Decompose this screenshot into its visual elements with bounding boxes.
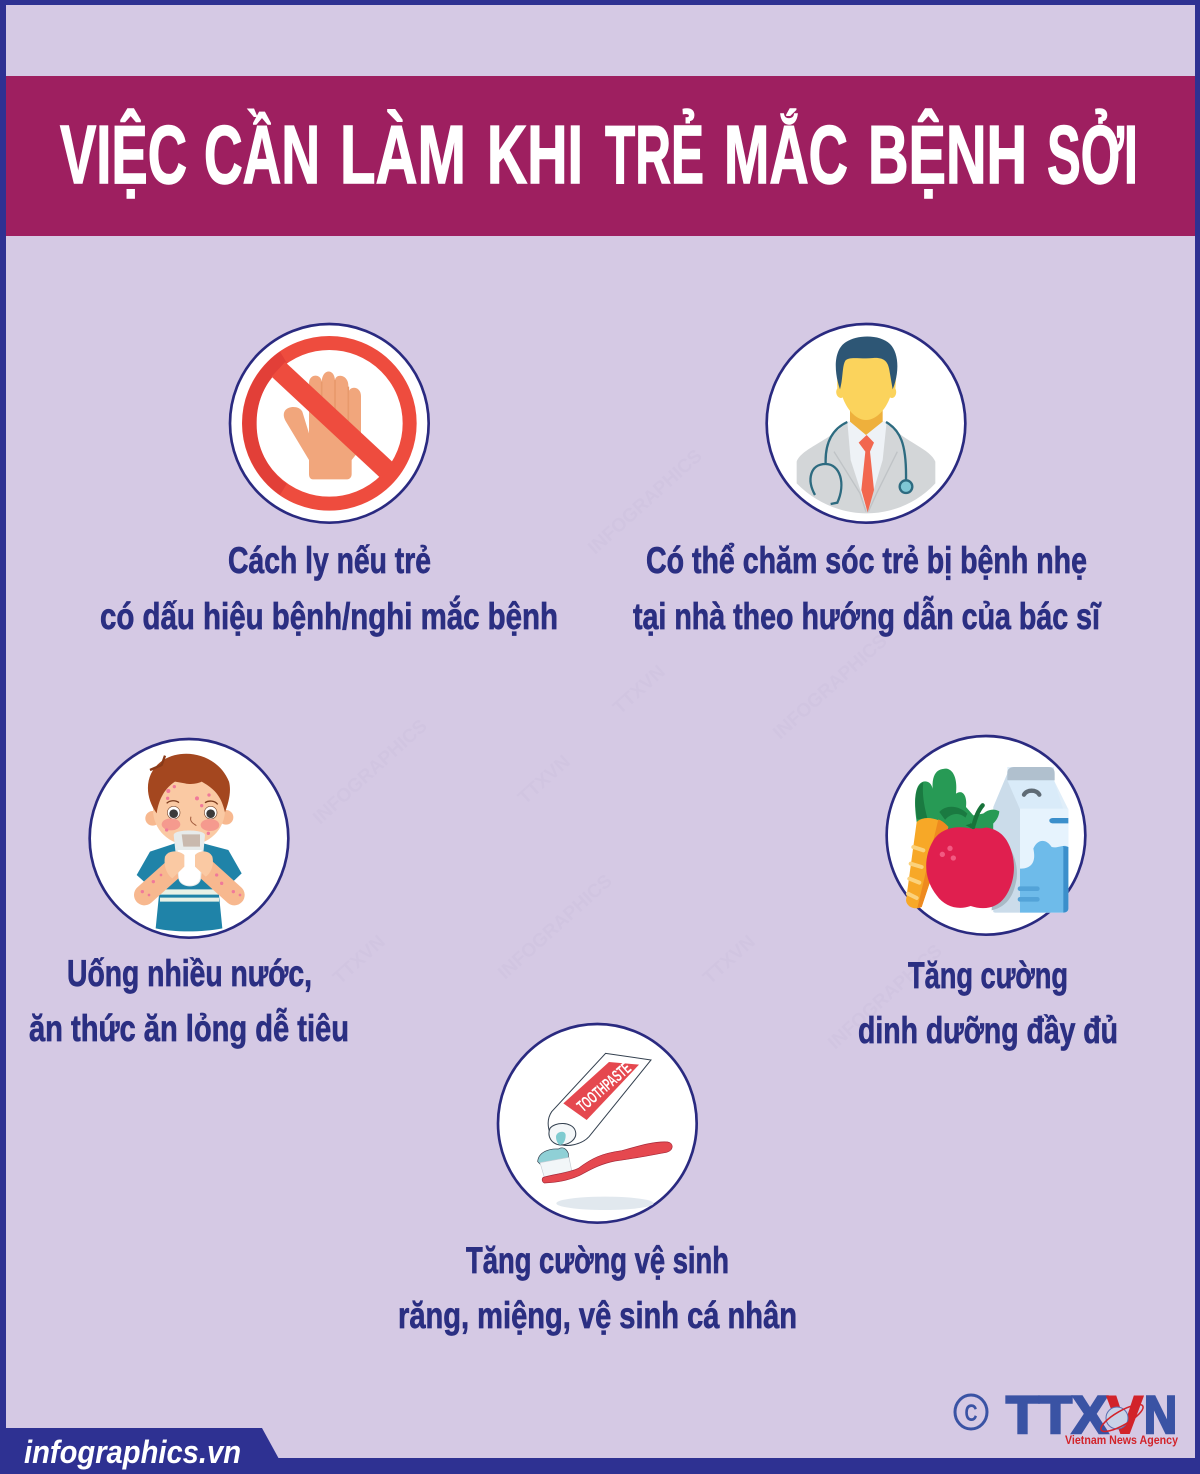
panel: oral hygiene — [398, 1024, 797, 1336]
agency tagline: Vietnam News Agency — [1065, 1433, 1178, 1447]
label: toothpaste: TOOTHPASTE — [573, 1058, 635, 1116]
caption: ăn thức ăn lỏng dễ tiêu — [29, 1008, 349, 1049]
title: VIỆC — [60, 108, 187, 201]
footer tab: infographics.vn — [0, 1428, 1200, 1474]
infographic canvas: INFOGRAPHICS — [274, 391, 397, 504]
caption: Cách ly nếu trẻ — [228, 540, 431, 581]
infographic canvas: INFOGRAPHICS — [824, 941, 947, 1054]
caption — [29, 953, 349, 1049]
site name: infographics.vn — [24, 1434, 241, 1470]
infographic canvas: TTXVN — [329, 931, 390, 989]
copyright symbol: C — [964, 1400, 978, 1427]
icon: boy with rash drinking — [90, 739, 288, 938]
title: CẦN — [204, 108, 320, 201]
title banner — [6, 76, 1195, 236]
infographic canvas: TTXVN — [609, 661, 670, 719]
caption: Uống nhiều nước, — [67, 953, 312, 994]
title: TRẺ — [605, 108, 704, 201]
caption: Tăng cường — [908, 955, 1068, 996]
wordmark: V — [1107, 1386, 1143, 1445]
infographic canvas: TTXVN — [699, 931, 760, 989]
title: MẮC — [724, 108, 848, 201]
icon: toothpaste and toothbrush — [498, 1024, 697, 1223]
title: BỆNH — [868, 108, 1027, 201]
infographic canvas: INFOGRAPHICS — [309, 716, 432, 829]
wordmark: N — [1144, 1386, 1177, 1445]
panel: home care by doctor's guidance — [633, 324, 1102, 637]
caption — [858, 955, 1118, 1051]
panel: full nutrition — [858, 736, 1118, 1051]
caption: có dấu hiệu bệnh/nghi mắc bệnh — [100, 595, 558, 637]
infographic canvas: INFOGRAPHICS — [769, 631, 892, 744]
caption — [100, 540, 558, 637]
title: LÀM — [340, 108, 466, 201]
caption: răng, miệng, vệ sinh cá nhân — [398, 1295, 797, 1336]
wordmark: TTX — [1006, 1386, 1108, 1445]
title: KHI — [487, 108, 583, 201]
icon: no-touch hand sign — [230, 324, 429, 523]
copyright symbol — [955, 1395, 987, 1429]
infographic canvas: INFOGRAPHICS — [584, 446, 707, 559]
icon: carrot, apple and milk carton — [887, 736, 1085, 935]
panel: drink water, liquid food — [29, 739, 349, 1049]
title: SỞI — [1047, 108, 1138, 201]
icon: doctor — [767, 324, 965, 523]
caption: Tăng cường vệ sinh — [466, 1240, 729, 1281]
panel: isolate the child — [100, 324, 558, 637]
caption — [398, 1240, 797, 1336]
infographic canvas: TTXVN — [514, 751, 575, 809]
title — [60, 108, 1138, 201]
caption: dinh dưỡng đầy đủ — [858, 1010, 1118, 1051]
caption — [633, 540, 1102, 637]
logo: TTXVN Vietnam News Agency — [955, 1386, 1178, 1447]
infographic canvas: INFOGRAPHICS — [494, 871, 617, 984]
wordmark — [1006, 1386, 1177, 1445]
